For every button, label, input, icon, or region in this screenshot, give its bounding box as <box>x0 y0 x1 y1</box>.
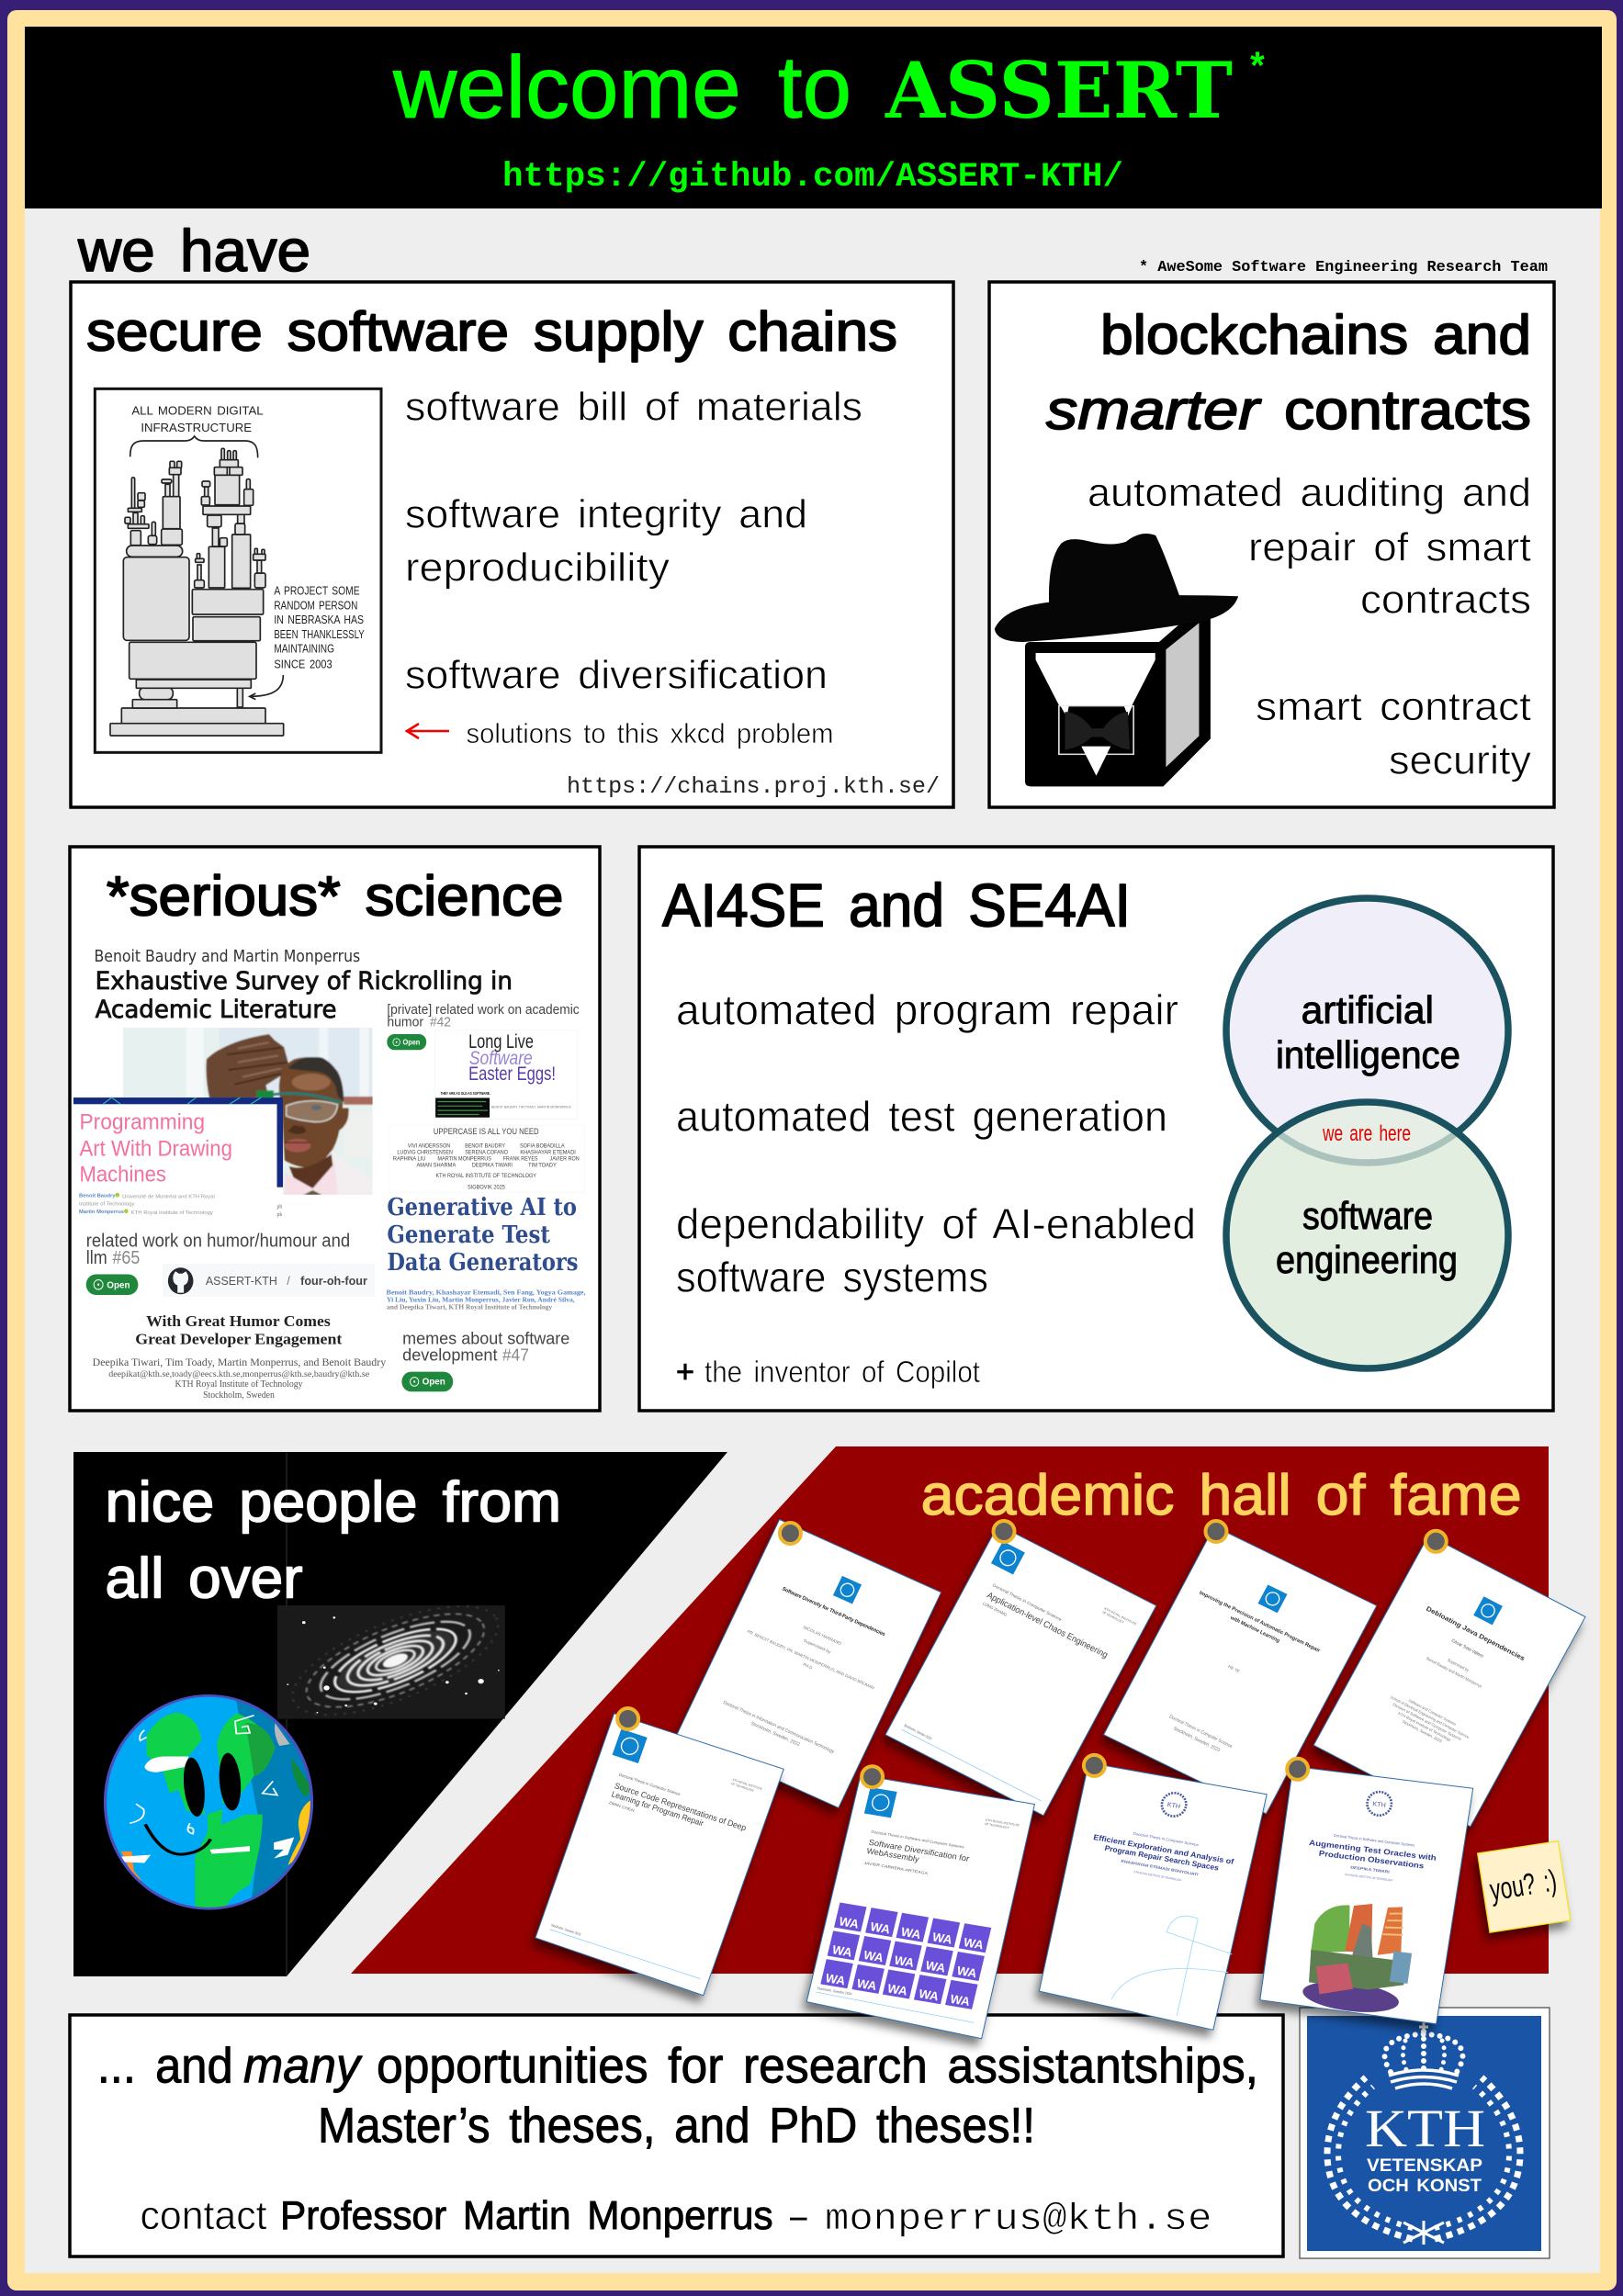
paper: uppercase is all you need: UPPERCASE IS ALL YOU NEED <box>434 1127 539 1136</box>
paper: great humor: Deepika Tiwari, Tim Toady, Martin Monperrus, and Benoit Baudry <box>93 1356 386 1368</box>
thesis: Efficient Exploration and Analysis of Program Repair Search Spaces <box>1039 1762 1267 2030</box>
WebAssembly logo grid: WA <box>955 1964 978 1980</box>
title: * <box>1246 48 1268 92</box>
topic list: software diversification <box>405 652 828 698</box>
circle labels: engineering <box>1276 1238 1458 1281</box>
xkcd comic: IN NEBRASKA HAS <box>274 613 364 626</box>
WebAssembly logo grid: WA <box>869 1919 892 1936</box>
WebAssembly logo grid: WA <box>862 1948 885 1964</box>
authors: ph <box>277 1204 282 1210</box>
thesis: Software Diversification for WebAssembly: Software Diversification for <box>868 1838 970 1863</box>
thesis: Application-level Chaos Engineering: Application-level Chaos Engineering <box>985 1591 1110 1660</box>
paper: uppercase is all you need: KTH ROYAL INSTITUTE OF TECHNOLOGY <box>436 1173 537 1179</box>
thesis: Efficient Exploration and Analysis of Program Repair Search Spaces: KTH ROYAL INSTITUTE OF TECHNOLOGY <box>1133 1870 1183 1882</box>
circle: software engineering <box>1226 1102 1508 1368</box>
issue: memes: development <box>402 1345 497 1365</box>
thesis: Augmenting Test Oracles with Production Observations: Doctoral Thesis in Software and Computer Systems <box>1334 1833 1414 1848</box>
thesis: Application-level Chaos Engineering: OF TECHNOLOGY <box>1101 1610 1125 1625</box>
WebAssembly logo grid <box>820 1902 991 2009</box>
thesis: Augmenting Test Oracles with Production Observations: DEEPIKA TIWARI <box>1350 1865 1390 1874</box>
circle: artificial intelligence <box>1226 898 1508 1163</box>
authors: Martin Monperrus <box>79 1210 124 1215</box>
open badge: Open <box>107 1280 130 1290</box>
github url: https://github.com/ASSERT-KTH/ <box>502 158 1123 197</box>
WebAssembly logo grid: WA <box>893 1953 916 1970</box>
thesis: Software Diversification for WebAssembly: WebAssembly <box>866 1846 920 1863</box>
panel: contact and opportunities <box>70 2015 1283 2257</box>
thesis: Software Diversification for WebAssembly <box>806 1775 1034 2039</box>
WebAssembly logo grid: WA <box>886 1982 909 1998</box>
thesis: Application-level Chaos Engineering: Doctoral Thesis in Computer Science <box>992 1582 1063 1622</box>
thesis: Source Code Representations of Deep Learning for Program Repair: OF TECHNOLOGY <box>731 1782 755 1793</box>
thesis: Efficient Exploration and Analysis of Program Repair Search Spaces: Efficient Exploration and Analysis of <box>1093 1832 1234 1866</box>
heading <box>105 1471 561 1611</box>
thesis: Software Diversification for WebAssembly: JAVIER CABRERA-ARTEAGA <box>863 1861 929 1875</box>
panel: secure software supply chains <box>71 282 953 807</box>
thesis: Source Code Representations of Deep Learning for Program Repair: Source Code Representations of Deep <box>614 1781 748 1832</box>
thesis: Software Diversity for Third-Party Dependencies: Stockholm, Sweden, 2022 <box>750 1721 801 1748</box>
thesis: Improving the Precision of Automatic Program Repair: Stockholm, Sweden, 2023 <box>1172 1726 1221 1753</box>
KTH logo: OCH KONST <box>1368 2177 1482 2196</box>
paper: great humor: KTH Royal Institute of Technology <box>175 1379 303 1390</box>
opportunities text: many <box>243 2039 363 2094</box>
thesis: Source Code Representations of Deep Learning for Program Repair: Stockholm, Sweden 2023 <box>550 1922 581 1937</box>
authors <box>79 1193 282 1218</box>
xkcd comic: A PROJECT SOME <box>274 584 360 597</box>
venn diagram <box>1226 898 1508 1368</box>
WebAssembly logo grid: WA <box>831 1942 854 1960</box>
topic list: automated test generation <box>676 1093 1167 1141</box>
paper: uppercase is all you need: KHASHAYAR ETEMADI <box>520 1149 576 1156</box>
paper: generative AI <box>387 1192 586 1311</box>
heading: all over <box>105 1547 303 1611</box>
issue: humor and llm: llm <box>86 1247 107 1268</box>
open badge <box>401 1372 453 1391</box>
thesis: Debloating Java Dependencies <box>1313 1536 1585 1827</box>
thesis: Source Code Representations of Deep Learning for Program Repair <box>535 1714 783 1996</box>
paper: great humor: deepikat@kth.se,toady@eecs.kth.se,monperrus@kth.se,baudry@kth.se <box>108 1370 369 1379</box>
heading: we have: we have <box>77 218 310 284</box>
KTH logo <box>1300 2008 1550 2258</box>
contact line: monperrus@kth.se <box>825 2199 1212 2241</box>
paper: great humor: Great Developer Engagement <box>135 1332 343 1348</box>
thesis: Application-level Chaos Engineering: KTH ROYAL INSTITUTE <box>1104 1606 1138 1626</box>
thesis: Software Diversification for WebAssembly: OF TECHNOLOGY <box>985 1822 1010 1829</box>
cover illustration <box>1301 1896 1418 2018</box>
topic list: reproducibility <box>405 546 670 590</box>
open badge <box>86 1275 138 1295</box>
opportunities text <box>97 2039 1258 2153</box>
xkcd comic: INFRASTRUCTURE <box>141 421 252 434</box>
heading: nice people from <box>105 1471 561 1534</box>
WebAssembly logo grid: WA <box>949 1992 972 2009</box>
thesis: Improving the Precision of Automatic Program Repair <box>1104 1526 1377 1814</box>
icon: smiling earth character <box>106 1695 317 1913</box>
thesis: Software Diversification for WebAssembly: KTH ROYAL INSTITUTE <box>986 1818 1020 1828</box>
panel: AI4SE and SE4AI <box>639 847 1553 1411</box>
thesis: Debloating Java Dependencies: Software and Computer Systems <box>1408 1698 1457 1727</box>
thesis: Improving the Precision of Automatic Program Repair: HE YE <box>1227 1664 1241 1673</box>
title: Art With Drawing <box>79 1136 232 1161</box>
paper: long live software easter eggs: Easter Eggs! <box>468 1064 556 1085</box>
thesis: Augmenting Test Oracles with Production Observations: Production Observations <box>1318 1849 1425 1871</box>
paper: rickrolling: Benoit Baudry and Martin Monperrus <box>95 947 360 966</box>
paper: rickrolling <box>95 947 513 1024</box>
open badge: Open <box>403 1038 420 1047</box>
WebAssembly logo grid: WA <box>924 1958 947 1975</box>
pins <box>617 1521 1447 1787</box>
thesis: Software Diversity for Third-Party Dependencies: PH.D <box>802 1662 814 1671</box>
contact line <box>140 2193 1212 2241</box>
thesis: Source Code Representations of Deep Learning for Program Repair: Doctoral Thesis in Computer Science <box>618 1773 682 1796</box>
thesis: Augmenting Test Oracles with Production Observations: KTH ROYAL INSTITUTE OF TECHNOLOGY <box>1345 1873 1393 1883</box>
title: Machines <box>79 1162 166 1187</box>
project url: https://chains.proj.kth.se/ <box>567 773 940 800</box>
circle labels: artificial <box>1302 988 1434 1031</box>
circle labels <box>1276 988 1460 1281</box>
heading: academic hall of fame <box>921 1464 1522 1527</box>
thesis: Application-level Chaos Engineering <box>885 1525 1156 1816</box>
thesis: Debloating Java Dependencies: Debloating Java Dependencies <box>1425 1605 1526 1662</box>
topic text: contracts <box>1360 577 1531 623</box>
paper: uppercase is all you need: SOFIA BOBADILLA <box>520 1143 565 1150</box>
heading: secure software supply chains <box>86 301 897 362</box>
paper: uppercase is all you need: JAVIER RON <box>550 1155 580 1162</box>
heading: AI4SE and SE4AI <box>662 871 1131 939</box>
paper: rickrolling: Exhaustive Survey of Rickrolling in <box>96 967 513 996</box>
paper: generative AI: Generate Test <box>387 1220 550 1248</box>
github repo card: / <box>287 1274 290 1288</box>
topic text: security <box>1389 738 1531 782</box>
thesis: Source Code Representations of Deep Learning for Program Repair: Learning for Program Repair <box>610 1789 704 1828</box>
WebAssembly logo grid: WA <box>855 1976 878 1993</box>
paper: great humor <box>93 1313 386 1401</box>
thesis: Improving the Precision of Automatic Program Repair: Doctoral Thesis in Computer Science <box>1168 1715 1233 1750</box>
paper: uppercase is all you need: RAPHINA LIU <box>393 1155 426 1162</box>
title <box>79 1109 232 1187</box>
topic list: dependability of AI-enabled <box>676 1199 1196 1247</box>
sticky note: you?: you? :) <box>1487 1863 1559 1907</box>
WebAssembly logo grid: WA <box>838 1915 861 1931</box>
paper: uppercase is all you need: DEEPIKA TIWARI <box>472 1162 513 1169</box>
arrow caption: solutions to this xkcd problem <box>467 717 834 749</box>
authors: pk <box>277 1212 282 1218</box>
paper: uppercase is all you need: TIM TOADY <box>528 1162 558 1169</box>
paper: rickrolling: Academic Literature <box>96 996 337 1024</box>
paper: uppercase is all you need: AMAN SHARMA <box>416 1162 456 1169</box>
panel: blockchains and smarter contracts <box>989 282 1554 807</box>
issue: humor and llm: #65 <box>112 1247 140 1268</box>
topic text: smart contract <box>1256 684 1531 729</box>
paper: long live software easter eggs: THEY ARE AS OLD AS SOFTWARE. <box>440 1091 490 1096</box>
authors: Institute of Technology <box>79 1201 135 1207</box>
header banner <box>25 27 1602 208</box>
topic list: software integrity and <box>405 492 807 536</box>
issue: humor and llm: related work on humor/humour and <box>86 1231 350 1252</box>
paper: great humor: Stockholm, Sweden <box>203 1390 275 1401</box>
WebAssembly logo grid: WA <box>931 1930 954 1947</box>
authors: Benoit Baudry <box>79 1193 116 1199</box>
KTH logo: VETENSKAP <box>1367 2156 1482 2176</box>
contact line: contact <box>140 2193 266 2238</box>
paper: great humor: With Great Humor Comes <box>146 1313 331 1330</box>
inventor note: the inventor of Copilot <box>704 1355 980 1389</box>
thesis: Debloating Java Dependencies: Supervised by <box>1447 1658 1471 1672</box>
issue: humor and llm <box>86 1231 350 1268</box>
paper: uppercase is all you need <box>389 1125 584 1193</box>
xkcd comic: RANDOM PERSON <box>274 599 357 612</box>
contact line: – <box>790 2193 807 2238</box>
open badge: Open <box>423 1377 445 1388</box>
topic list: automated program repair <box>676 986 1178 1034</box>
thesis: Efficient Exploration and Analysis of Program Repair Search Spaces: KTH <box>1167 1801 1181 1810</box>
paper: long live software easter eggs: BENOIT BAUDRY, TIM TOADY, MARTIN MONPERRUS <box>491 1105 571 1109</box>
github repo card: four-oh-four <box>300 1274 367 1288</box>
topic list: software systems <box>676 1253 988 1300</box>
github repo card: ASSERT-KTH <box>206 1274 277 1288</box>
paper: uppercase is all you need: MARTIN MONPERRUS <box>437 1155 491 1162</box>
xkcd comic <box>95 388 381 752</box>
thesis: Software Diversity for Third-Party Dependencies: Doctoral Thesis in Information and Communication Technology <box>722 1700 835 1755</box>
thesis: Debloating Java Dependencies: Benoit Baudry and Martin Monperrus <box>1426 1656 1483 1689</box>
arrow: points to the xkcd comic <box>407 724 449 738</box>
paper: uppercase is all you need: SIGBOVIK 2025 <box>468 1185 505 1191</box>
paper: generative AI: Yi Liu, Yuxin Liu, Martin Monperrus, Javier Ron, André Silva, <box>387 1298 575 1304</box>
opportunities text: opportunities for research assistantships, <box>377 2039 1258 2094</box>
xkcd comic: BEEN THANKLESSLY <box>274 628 365 641</box>
thesis: Software Diversification for WebAssembly: Stockholm, Sweden 2024 <box>817 1986 853 1996</box>
title: Programming <box>79 1109 205 1134</box>
authors: KTH Royal Institute of Technology <box>131 1210 213 1216</box>
topic list <box>676 986 1196 1300</box>
footnote: acronym: * AweSome Software Engineering Research Team <box>1139 259 1548 276</box>
thesis: Efficient Exploration and Analysis of Program Repair Search Spaces: Program Repair Search Spaces <box>1104 1843 1220 1873</box>
icon: smart contract box wearing a hat and bow tie <box>995 534 1238 786</box>
paper: long live software easter eggs: Long Live <box>468 1032 534 1052</box>
title <box>392 39 1268 137</box>
contact line: Professor Martin Monperrus <box>280 2193 773 2238</box>
topic text <box>1088 470 1531 782</box>
paper: uppercase is all you need: BENOIT BAUDRY <box>465 1143 506 1150</box>
thesis: Improving the Precision of Automatic Program Repair: with Machine Learning <box>1228 1615 1280 1644</box>
thesis: Software Diversity for Third-Party Dependencies: PR. BENOIT BAUDRY, PR. MARTIN MONPERRUS, AND DAVID BROMAN <box>747 1629 875 1690</box>
thesis: Source Code Representations of Deep Learning for Program Repair: KTH ROYAL INSTITUTE <box>732 1778 763 1791</box>
photo: scientist holding a test tube <box>123 1028 377 1195</box>
thesis: Debloating Java Dependencies: KTH Royal Institute of Technology <box>1397 1711 1452 1742</box>
panel: serious science <box>70 847 600 1411</box>
title: welcome to <box>392 39 851 137</box>
thesis: Software Diversification for WebAssembly: Doctoral Thesis in Software and Computer Systems <box>871 1829 964 1850</box>
overlap label: we are here <box>1322 1121 1411 1146</box>
WebAssembly logo grid: WA <box>963 1935 986 1952</box>
panel: nice people from all over <box>73 1452 727 1976</box>
thesis: Software Diversity for Third-Party Dependencies <box>677 1519 941 1807</box>
heading: smarter <box>1046 379 1261 441</box>
heading: *serious* science <box>107 864 563 928</box>
topic text: automated auditing and <box>1088 470 1531 515</box>
WebAssembly logo grid: WA <box>824 1971 847 1987</box>
issue: academic humor: [private] related work on academic <box>387 1003 580 1018</box>
thesis: Software Diversity for Third-Party Dependencies: Supervised by <box>803 1638 832 1655</box>
issue: memes: #47 <box>502 1345 529 1365</box>
xkcd comic: ALL MODERN DIGITAL <box>131 404 264 418</box>
thesis: Debloating Java Dependencies: Division of Software and Computer Systems <box>1392 1702 1462 1741</box>
github repo card <box>163 1264 375 1297</box>
thesis: Debloating Java Dependencies: School of Electrical Engineering and Computer Science <box>1390 1694 1471 1739</box>
issue: academic humor <box>387 1003 580 1030</box>
paper: uppercase is all you need: SERENA COFANO <box>465 1149 508 1156</box>
paper: uppercase is all you need: FRANK REYES <box>503 1155 537 1162</box>
paper: generative AI: and Deepika Tiwari, KTH Royal Institute of Technology <box>387 1305 553 1311</box>
authors: Université de Montréal and KTH Royal <box>122 1195 215 1200</box>
thesis: Improving the Precision of Automatic Program Repair: Improving the Precision of Automatic Program Repair <box>1198 1591 1322 1654</box>
WebAssembly logo grid: WA <box>918 1986 941 2003</box>
paper: generative AI: Generative AI to <box>387 1192 577 1221</box>
sticky note: you? <box>1478 1841 1571 1932</box>
circle labels: software <box>1302 1194 1433 1237</box>
heading: contracts <box>1284 379 1531 441</box>
issue: academic humor: #42 <box>430 1015 451 1030</box>
topic text: repair of smart <box>1248 525 1531 569</box>
thesis: Application-level Chaos Engineering: LONG ZHANG <box>982 1601 1009 1617</box>
paper: generative AI: Data Generators <box>387 1248 579 1276</box>
thesis: Source Code Representations of Deep Learning for Program Repair: ZIMIN CHEN <box>608 1800 635 1813</box>
thesis: Software Diversity for Third-Party Dependencies: NICOLAS HARRAND <box>803 1625 843 1647</box>
issue: academic humor: humor <box>387 1015 423 1030</box>
thesis: Debloating Java Dependencies: César Soto Valero <box>1450 1638 1484 1660</box>
opportunities text: ... and <box>97 2039 233 2094</box>
heading <box>1046 304 1531 441</box>
issue: memes <box>402 1329 569 1365</box>
thesis: Application-level Chaos Engineering: Stockholm, Sweden 2023 <box>903 1723 932 1740</box>
paper: programming art <box>73 1097 283 1222</box>
issue: memes: memes about software <box>402 1329 569 1348</box>
xkcd comic: SINCE 2003 <box>274 658 332 670</box>
paper: long live software easter eggs <box>435 1030 578 1119</box>
paper: long live software easter eggs: Software <box>469 1048 533 1069</box>
KTH logo: KTH <box>1365 2099 1485 2158</box>
opportunities text: Master’s theses, and PhD theses!! <box>318 2098 1035 2153</box>
panel: academic hall of fame board <box>351 1446 1549 1974</box>
topic list <box>405 384 862 698</box>
paper: uppercase is all you need: VIVI ANDERSSON <box>408 1143 451 1150</box>
image: galaxy <box>275 1584 516 1737</box>
thesis: Debloating Java Dependencies: Stockholm, Sweden, 2023 <box>1402 1719 1443 1744</box>
thesis: Augmenting Test Oracles with Production Observations <box>1260 1766 1473 2024</box>
topic list: software bill of materials <box>405 384 862 430</box>
thesis: Efficient Exploration and Analysis of Program Repair Search Spaces: KHASHAYAR ETEMADI BONYOLIATI <box>1121 1859 1199 1876</box>
thesis: Software Diversity for Third-Party Dependencies: Software Diversity for Third-Party Dependencies <box>781 1587 885 1638</box>
open badge <box>387 1034 426 1050</box>
title: ASSERT <box>885 45 1233 136</box>
thesis: Efficient Exploration and Analysis of Program Repair Search Spaces: Doctoral Thesis in Computer Science <box>1133 1831 1200 1847</box>
circle labels: intelligence <box>1276 1033 1460 1076</box>
xkcd comic: MAINTAINING <box>274 643 334 656</box>
heading: blockchains and <box>1100 304 1531 366</box>
inventor note: + <box>676 1355 694 1390</box>
paper: generative AI: Benoit Baudry, Khashayar Etemadi, Sen Fang, Yogya Gamage, <box>387 1289 586 1297</box>
thesis: Augmenting Test Oracles with Production Observations: Augmenting Test Oracles with <box>1309 1838 1437 1863</box>
paper: uppercase is all you need: LUDVIG CHRISTENSEN <box>397 1149 453 1156</box>
thesis: Augmenting Test Oracles with Production Observations: KTH <box>1372 1800 1386 1809</box>
WebAssembly logo grid: WA <box>899 1925 923 1941</box>
